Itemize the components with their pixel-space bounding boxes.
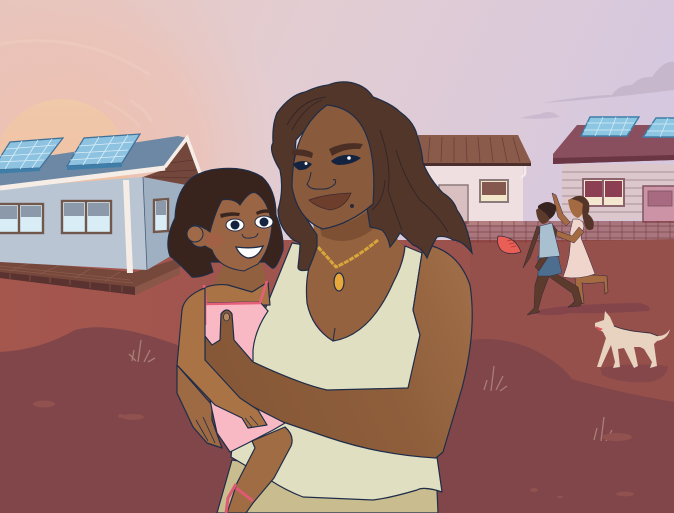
woman's hair [272, 82, 472, 271]
sun [0, 99, 129, 233]
window [583, 179, 624, 206]
roof [418, 135, 531, 166]
beauty mark [350, 204, 354, 208]
downpipe [521, 166, 525, 178]
woman's finger lines [196, 417, 215, 443]
clouds [520, 62, 674, 119]
white fascia [0, 138, 200, 188]
woman's eyes [293, 155, 361, 170]
deck [0, 258, 180, 295]
child's face [189, 192, 272, 271]
cleavage line [333, 328, 335, 341]
roof [0, 136, 187, 187]
sun rays [0, 41, 152, 127]
solar panel 1 [0, 138, 63, 174]
door [439, 185, 468, 223]
sun glow [0, 0, 330, 300]
boy's head [536, 206, 551, 224]
solar panel [581, 117, 639, 136]
woman's nose [307, 172, 336, 189]
solar panel [643, 118, 674, 137]
boy's shorts [538, 256, 562, 276]
child's mouth [236, 246, 263, 258]
sky [0, 0, 674, 300]
front ground mound [0, 327, 674, 513]
child's neck [205, 262, 268, 302]
child's head [168, 168, 283, 277]
boy running [523, 202, 582, 315]
house: middle cream house [418, 135, 531, 225]
upper ground right [470, 239, 674, 405]
fence [456, 221, 674, 243]
door [643, 186, 674, 222]
child [200, 262, 285, 452]
child's chest [200, 282, 270, 306]
girl's dress [563, 219, 595, 278]
child's arm [177, 288, 267, 428]
window [480, 180, 508, 202]
child's leg [227, 427, 292, 513]
dog [595, 311, 670, 368]
windows [0, 199, 168, 233]
pebbles [33, 400, 634, 498]
woman's face [292, 105, 374, 229]
girl's head [568, 198, 584, 218]
girl's arm [554, 227, 584, 243]
girl running [552, 193, 608, 307]
child's finger lines [245, 416, 258, 427]
woman's mouth [309, 193, 351, 210]
blinds [0, 201, 166, 219]
boy's arms [523, 224, 557, 271]
wall [425, 165, 523, 225]
child's dress [204, 302, 285, 452]
girl's back leg [569, 275, 608, 307]
children shadow [530, 303, 650, 315]
wall [0, 177, 147, 270]
child's sandal [226, 484, 253, 513]
woman's skirt [217, 460, 438, 513]
girl's hair [571, 196, 594, 230]
child's nose [242, 233, 258, 238]
solar panel 2 [67, 134, 140, 170]
woman's tank top [231, 243, 442, 500]
child's eyes [226, 216, 273, 231]
woman's eyebrows [292, 143, 363, 158]
child's cheek [205, 233, 223, 247]
hair strands [287, 97, 448, 232]
football [497, 236, 521, 254]
thumbnail [224, 313, 230, 321]
dress straps [204, 281, 267, 325]
chin shadow [318, 205, 378, 241]
gable [143, 141, 199, 187]
girl's raised arm [552, 193, 570, 226]
back ground [0, 240, 674, 513]
house: right pink house [553, 117, 674, 222]
boy's legs [527, 272, 582, 315]
child's ear [187, 226, 203, 242]
dog shadow [600, 364, 668, 382]
woman's arm and shoulder [205, 244, 472, 458]
child's hair back [168, 168, 283, 277]
wall [562, 164, 674, 220]
boy's hair [538, 202, 556, 219]
column [123, 180, 133, 273]
grass tufts [129, 340, 612, 441]
woman's back hand [177, 365, 222, 448]
house: left blue house [0, 134, 200, 295]
child's eyebrows [220, 209, 270, 218]
necklace [318, 240, 378, 291]
woman's neck and chest [306, 205, 404, 343]
roof [553, 125, 674, 164]
boy's singlet [539, 223, 560, 258]
woman [177, 205, 472, 513]
